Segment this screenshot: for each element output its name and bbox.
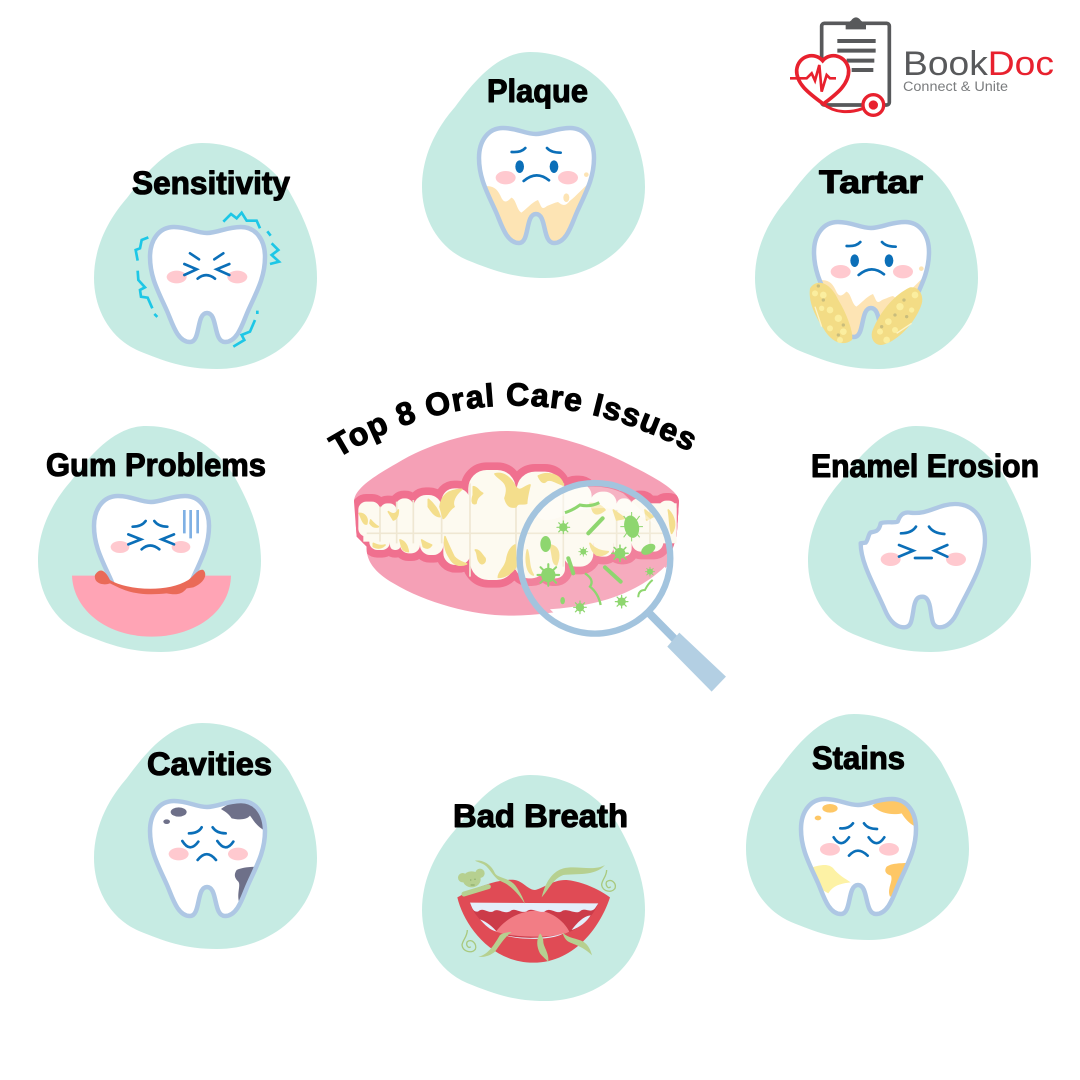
panel: Gum Problems: Gum Problems [46,447,266,483]
panel: Bad Breath: Bad Breath [453,798,628,834]
panel: Enamel Erosion [808,426,1039,652]
germs [538,503,657,614]
logo: BookDoc: Connect & Unite [903,79,1008,94]
panel: Sensitivity: Sensitivity [132,165,290,201]
panel: Cavities [94,723,317,949]
logo: BookDoc [790,17,1054,115]
panel: Stains: Stains [812,740,905,776]
panel: Tartar: Tartar [819,164,923,200]
logo: BookDoc: BookDoc [903,45,1054,83]
panel: Gum Problems [38,426,266,652]
panel: Stains [746,714,969,940]
panel: Plaque [422,52,645,278]
panel: Plaque: Plaque [487,73,588,109]
lips and gums [354,431,679,616]
panel: Cavities: Cavities [147,746,272,782]
panel: Tartar [755,143,978,369]
magnifying glass lens [520,483,670,634]
panel: Enamel Erosion: Enamel Erosion [811,448,1039,484]
magnifying glass handle [649,613,675,639]
central illustration: teeth with plaque under magnifying glass [354,431,726,692]
title: Top 8 Oral Care Issues [326,382,695,455]
teeth [358,470,677,580]
panel: Bad Breath [422,775,645,1001]
panel: Sensitivity [94,143,317,369]
